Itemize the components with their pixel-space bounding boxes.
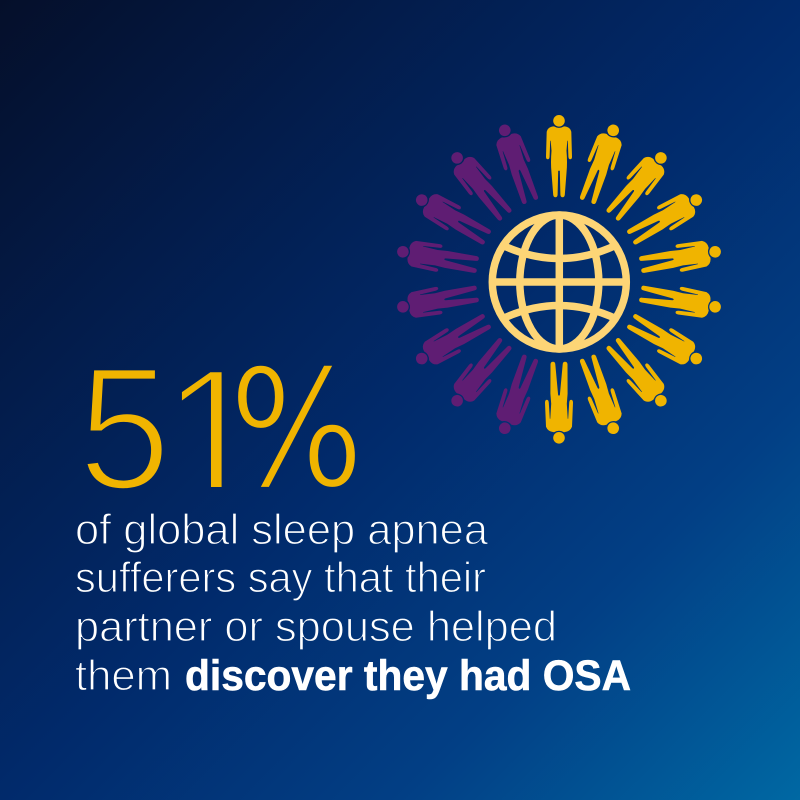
icon: person 240 deg xyxy=(410,308,495,374)
people ring: yellow figures xyxy=(545,115,723,444)
icon: person 60 deg xyxy=(623,185,708,250)
text line 4 light part: them xyxy=(75,652,172,700)
icon: person 100 deg xyxy=(638,280,723,322)
text line 3: partner or spouse helped xyxy=(75,603,557,651)
icon: person 120 deg xyxy=(623,308,708,374)
icon: person 320 deg xyxy=(443,144,517,225)
icon: person 260 deg xyxy=(395,280,480,322)
icon: person 180 deg xyxy=(545,362,573,444)
icon: person 0 deg xyxy=(546,115,572,197)
text line 2: sufferers say that their xyxy=(75,554,486,602)
people ring: purple figures xyxy=(395,120,544,438)
digit 1: 1 xyxy=(161,329,265,541)
text line 4 bold part: discover they had OSA xyxy=(185,652,631,700)
icon: person 80 deg xyxy=(638,237,723,279)
body text xyxy=(75,506,631,700)
icon: person 40 deg xyxy=(601,144,675,225)
icon: person 340 deg xyxy=(490,120,544,207)
icon: person 160 deg xyxy=(574,352,628,438)
icon: person 280 deg xyxy=(395,237,480,279)
icon: person 220 deg xyxy=(443,333,517,414)
headline statistic xyxy=(88,366,355,488)
icon: person 140 deg xyxy=(601,333,675,414)
icon: person 20 deg xyxy=(574,120,628,207)
icon: globe xyxy=(492,215,626,349)
percent sign: % xyxy=(229,334,364,525)
text line 1: of global sleep apnea xyxy=(75,506,488,554)
digit 5: 5 xyxy=(78,331,171,527)
icon: person 200 deg xyxy=(490,352,544,438)
icon: person 300 deg xyxy=(410,185,495,250)
